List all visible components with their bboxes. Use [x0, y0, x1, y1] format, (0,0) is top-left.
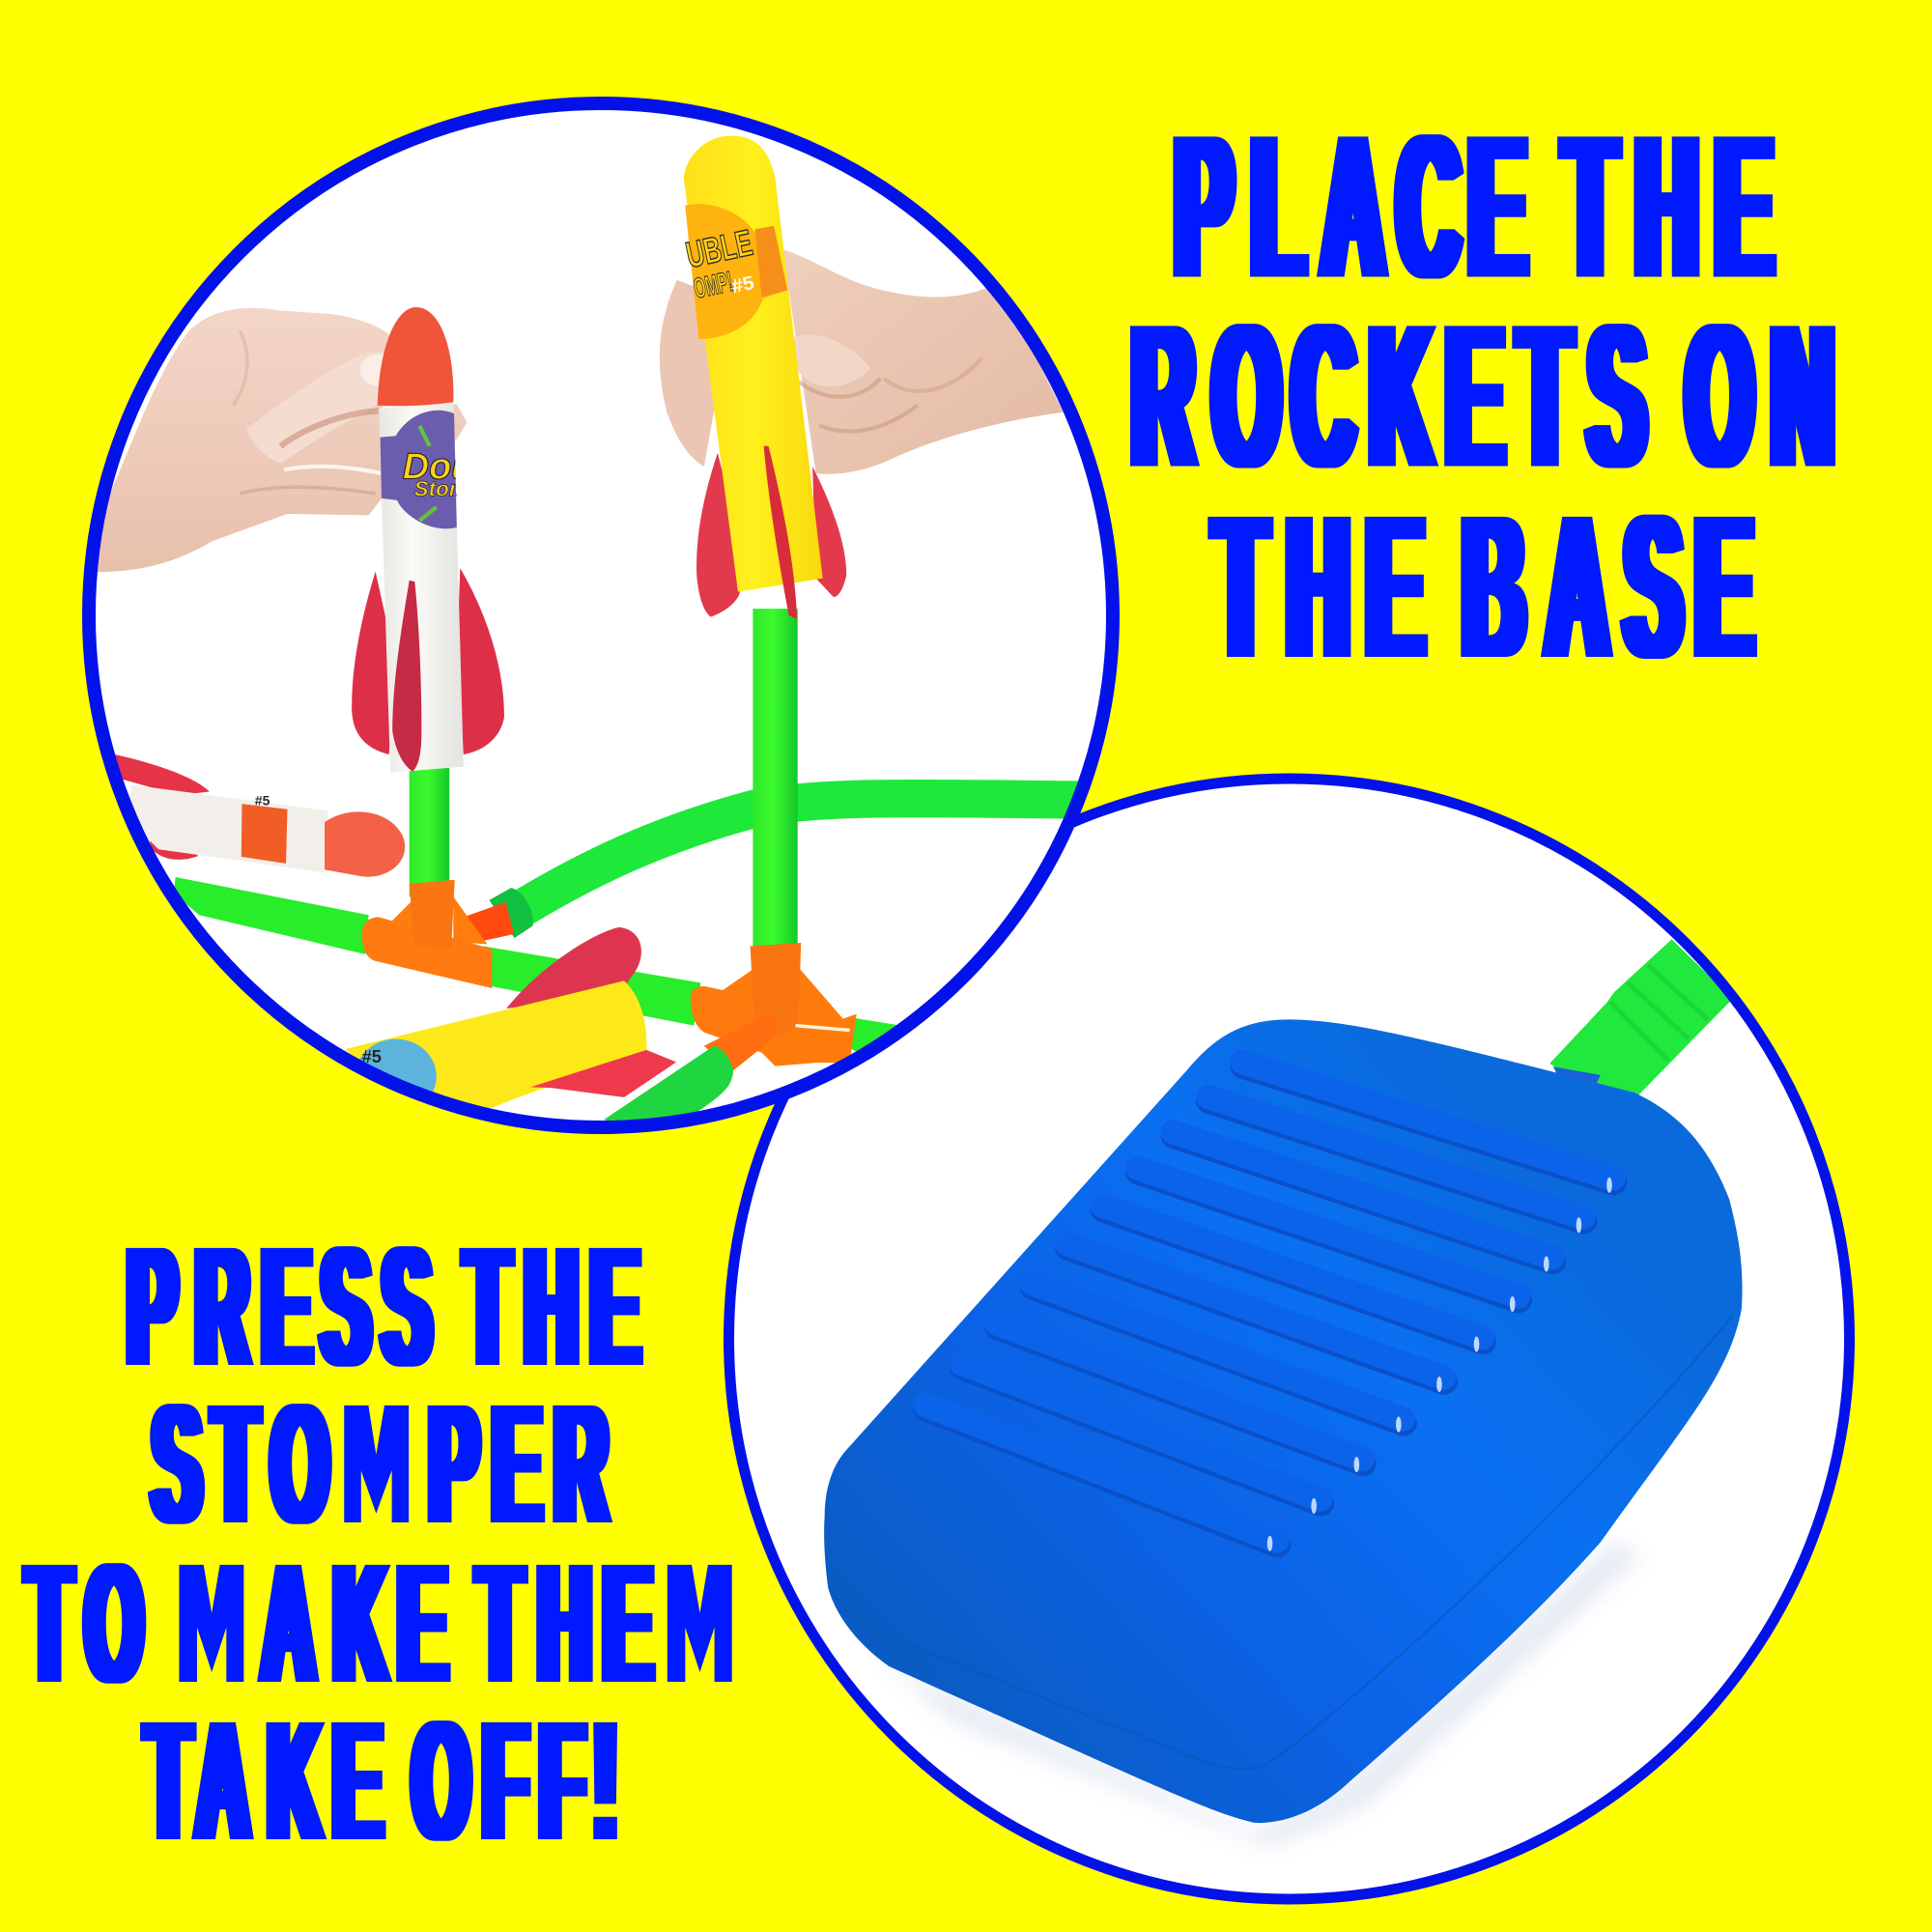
- icon: upright yellow rocket: #5: [730, 272, 756, 298]
- icon: left hand: [77, 308, 467, 575]
- panel: stomper photo circle: [728, 779, 1849, 1899]
- icon: left orange connector: [362, 880, 514, 988]
- icon: curved green hose: [490, 799, 1080, 938]
- rib highlights: [1267, 1178, 1612, 1551]
- icon: lying white rocket: #5: [255, 793, 270, 809]
- heading: place the rockets on the base: PLACE THE: [1175, 94, 1773, 321]
- icon: upright yellow rocket: [683, 136, 846, 619]
- panel: stomper ribs: [925, 1063, 1613, 1545]
- icon: upright white rocket: Dou: [403, 446, 473, 487]
- icon: upright white rocket: Stom: [414, 477, 469, 501]
- heading: press the stomper to make them take off: PRESS THE: [128, 1210, 639, 1402]
- heading: press the stomper to make them take off: STOMPER: [153, 1368, 608, 1559]
- icon: right launch tube: [753, 609, 798, 954]
- heading: press the stomper to make them take off: [27, 1210, 730, 1876]
- heading: place the rockets on the base: THE BASE: [1214, 474, 1752, 701]
- icon: lying yellow rocket: #5: [362, 1046, 382, 1066]
- icon: lying white rocket: [115, 754, 405, 877]
- stomper shadow: [882, 1542, 1641, 1846]
- icon: lying yellow rocket: [345, 927, 676, 1123]
- icon: upright yellow rocket: OMP!: [691, 266, 736, 305]
- icon: upright yellow rocket: UBLE: [683, 223, 756, 276]
- stomper body: [824, 1019, 1743, 1823]
- heading: press the stomper to make them take off: TAKE OFF!: [146, 1685, 617, 1876]
- icon: right orange connector: [604, 943, 857, 1130]
- heading: place the rockets on the base: [1132, 94, 1833, 701]
- heading: press the stomper to make them take off: TO MAKE THEM: [27, 1527, 730, 1719]
- heading: place the rockets on the base: ROCKETS ON: [1132, 283, 1833, 510]
- icon: green hose: [1549, 939, 1733, 1095]
- icon: left launch tube: [410, 768, 449, 896]
- panel: rockets photo circle: [77, 103, 1113, 1130]
- icon: upright white rocket: [352, 307, 504, 773]
- icon: back tube segments: [174, 877, 900, 1056]
- seam lines: [832, 1316, 1733, 1769]
- icon: right hand: [660, 248, 1064, 474]
